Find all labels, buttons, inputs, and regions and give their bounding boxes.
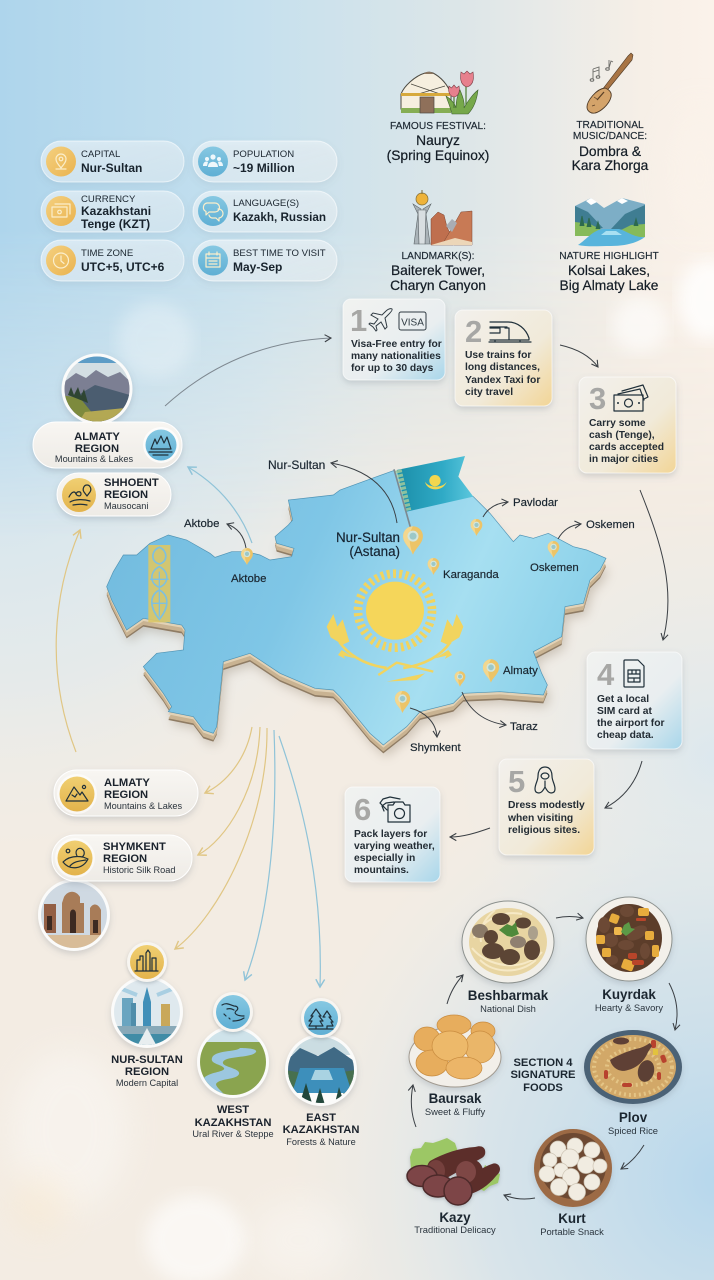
region: Almaty lower xyxy=(54,770,198,816)
pill: Shymkent region xyxy=(52,835,192,881)
dish xyxy=(584,1030,682,1104)
fact: languages: LANGUAGE(S) xyxy=(233,198,299,209)
icon badge: river xyxy=(213,992,253,1032)
food: Kuyrdak xyxy=(586,897,672,1013)
text: famous festival: Nauryz xyxy=(416,133,460,148)
pin: Aktobe xyxy=(241,548,253,565)
label: Aktobe inner: Aktobe xyxy=(231,573,266,585)
heading: signature foods: FOODS xyxy=(523,1082,563,1094)
region: East Kazakhstan: EAST xyxy=(306,1112,336,1124)
card: tip 5 modest dress: 5 xyxy=(508,764,525,799)
dish xyxy=(407,1138,500,1205)
food: Kazy: Kazy xyxy=(439,1210,471,1225)
icon: train xyxy=(489,322,531,342)
arrow: Kurt to Kazy xyxy=(504,1195,535,1199)
card: tip 1 visa: 1 xyxy=(350,303,367,338)
photo: mausoleum xyxy=(38,879,110,951)
card: tip 6 layers: especially in xyxy=(354,853,415,864)
card: tip 6 layers: varying weather, xyxy=(354,841,435,852)
arrow: Baursak to Beshbarmak xyxy=(447,975,463,1004)
icon badge: pine trees xyxy=(301,998,341,1038)
pin: Almaty xyxy=(483,659,499,683)
text: traditional music xyxy=(572,120,649,173)
text: traditional music: Dombra & xyxy=(579,144,641,159)
label: Karaganda: Karaganda xyxy=(443,569,499,581)
card: tip 2 trains: Yandex Taxi for xyxy=(465,375,540,386)
label: Aktobe outer: Aktobe xyxy=(184,518,219,530)
arrow: tip 2 to tip 3 xyxy=(560,345,598,367)
food: Kuyrdak: Kuyrdak xyxy=(602,987,656,1002)
region: Almaty lower: REGION xyxy=(104,789,148,801)
photo: river steppe xyxy=(196,1025,270,1098)
card: tip 3 cash: in major cities xyxy=(589,454,659,465)
food: Plov xyxy=(584,1030,682,1136)
panel: quick facts xyxy=(41,141,337,281)
card: tip 6 layers: mountains. xyxy=(354,865,409,876)
text: landmarks: Baiterek Tower, xyxy=(391,263,485,278)
heading: signature foods xyxy=(510,1057,576,1094)
region: Shhoent: REGION xyxy=(104,489,148,501)
food: Plov: Spiced Rice xyxy=(608,1125,658,1136)
region: Nur-Sultan: NUR-SULTAN xyxy=(111,1054,183,1066)
arrows: map to regions xyxy=(175,727,320,987)
label: Oskemen: Oskemen xyxy=(530,562,579,574)
fact: time zone: TIME ZONE xyxy=(81,248,133,259)
icon: visa stamp: VISA xyxy=(401,318,424,328)
arrow: south regions to north xyxy=(56,530,80,752)
food: Baursak: Baursak xyxy=(429,1091,482,1106)
label: Astana: (Astana) xyxy=(349,544,400,559)
food: Kazy: Traditional Delicacy xyxy=(414,1224,496,1235)
fact: languages xyxy=(193,191,337,232)
ornament: western band xyxy=(148,545,170,622)
card: tip 3 cash: 3 xyxy=(589,381,606,416)
text: famous festival: (Spring Equinox) xyxy=(387,148,489,163)
text: landmarks xyxy=(390,251,486,293)
text: landmarks: Charyn Canyon xyxy=(390,278,486,293)
pin: Shymkent xyxy=(395,691,410,713)
food: Kazy xyxy=(407,1138,500,1235)
food: Beshbarmak: National Dish xyxy=(480,1003,536,1014)
pill: Almaty region xyxy=(33,422,182,468)
pin: Astana xyxy=(403,526,423,555)
arrow: tip 3 to tip 4 xyxy=(640,490,668,640)
region: Nur-Sultan: REGION xyxy=(125,1066,169,1078)
dish xyxy=(586,897,672,981)
label: Nur-Sultan: Nur-Sultan xyxy=(268,458,325,472)
card: tip 3 cash: cash (Tenge), xyxy=(589,430,655,441)
photo: mountains xyxy=(60,354,134,428)
text: landmarks: LANDMARK(S): xyxy=(401,251,475,262)
card: tip 5 modest dress xyxy=(499,759,594,855)
pill: Almaty region: Mountains & Lakes xyxy=(55,454,133,464)
card: tip 2 trains: city travel xyxy=(465,387,513,398)
fact: time zone xyxy=(41,240,184,281)
region: East Kazakhstan: Forests & Nature xyxy=(286,1137,356,1147)
food: Baursak: Sweet & Fluffy xyxy=(425,1106,485,1117)
map labels xyxy=(184,458,635,754)
card: tip 4 sim: SIM card at xyxy=(597,706,653,717)
card: tip 5 modest dress: when visiting xyxy=(507,813,573,824)
region: Shhoent: Mausocani xyxy=(104,501,148,511)
emblem: sun and eagle xyxy=(327,574,463,682)
text: famous festival xyxy=(387,121,489,163)
fact: best time to visit xyxy=(193,240,337,281)
region: Almaty lower: Mountains & Lakes xyxy=(104,801,183,811)
fact: capital: Nur-Sultan xyxy=(81,161,142,175)
icon: cash xyxy=(614,385,648,411)
food: Plov: Plov xyxy=(619,1110,648,1125)
label: Almaty: Almaty xyxy=(503,665,538,677)
fact: time zone: UTC+5, UTC+6 xyxy=(81,260,165,274)
label: Oskemen north xyxy=(558,519,635,539)
label: Astana: Nur-Sultan xyxy=(336,530,400,545)
card: tip 2 trains: Use trains for xyxy=(465,350,531,361)
food: Kuyrdak: Hearty & Savory xyxy=(595,1002,663,1013)
food: Beshbarmak: Beshbarmak xyxy=(468,988,549,1003)
map: Kazakhstan xyxy=(107,456,609,757)
card: tip 4 sim: 4 xyxy=(597,657,615,692)
text: traditional music: MUSIC/DANCE: xyxy=(573,131,647,142)
icon: SIM card xyxy=(624,660,644,687)
region: Shymkent xyxy=(38,835,192,951)
panel: culture highlights xyxy=(387,53,659,293)
food: Kurt xyxy=(534,1129,612,1237)
photo: forest lake xyxy=(285,1034,359,1106)
heading: signature foods: SIGNATURE xyxy=(510,1069,576,1081)
icon: dombra and music notes xyxy=(587,53,633,113)
region: Nur-Sultan: Modern Capital xyxy=(116,1078,178,1088)
icon: camera and photos xyxy=(380,797,410,822)
region: Nur-Sultan xyxy=(110,942,184,1088)
card: tip 3 cash xyxy=(579,377,676,473)
fact: best time to visit: BEST TIME TO VISIT xyxy=(233,248,326,259)
food: Kurt: Portable Snack xyxy=(540,1226,604,1237)
arrow: Beshbarmak to Kuyrdak xyxy=(556,916,583,918)
card: tip 6 layers: 6 xyxy=(354,792,371,827)
card: tip 3 cash: cards accepted xyxy=(589,442,664,453)
arrow: tip 5 to tip 6 xyxy=(450,828,490,837)
card: tip 4 sim: the airport for xyxy=(597,718,665,729)
card: tip 4 sim: cheap data. xyxy=(597,730,654,741)
region: West Kazakhstan: WEST xyxy=(217,1104,249,1116)
arrow: tip 4 to tip 5 xyxy=(605,761,642,808)
label: Taraz: Taraz xyxy=(510,721,538,733)
heading: signature foods: SECTION 4 xyxy=(513,1057,573,1069)
card: tip 1 visa: Visa-Free entry for xyxy=(351,339,442,350)
icon: Baiterek tower and canyon xyxy=(413,190,472,245)
pin: Oskemen xyxy=(548,541,559,558)
label: Taraz xyxy=(462,692,538,733)
dish xyxy=(409,1015,501,1087)
label: Oskemen north: Oskemen xyxy=(586,519,635,531)
text: nature highlight: NATURE HIGHLIGHT xyxy=(559,251,659,262)
region: West Kazakhstan: KAZAKHSTAN xyxy=(195,1117,271,1129)
food: Kurt: Kurt xyxy=(558,1211,586,1226)
food: Baursak xyxy=(409,1015,501,1117)
arrow: Plov to Kurt xyxy=(621,1145,644,1169)
fact: population xyxy=(193,141,337,182)
region: West Kazakhstan xyxy=(192,992,274,1139)
dish xyxy=(462,901,554,983)
region: Almaty top xyxy=(33,354,182,468)
fact: population: ~19 Million xyxy=(233,161,295,175)
label: Aktobe outer xyxy=(184,518,246,548)
food: Beshbarmak xyxy=(462,901,554,1014)
icon: mountains and lake xyxy=(575,198,645,246)
text: traditional music: TRADITIONAL xyxy=(576,120,644,131)
card: tip 4 sim: Get a local xyxy=(597,694,649,705)
card: tip 2 trains: long distances, xyxy=(465,362,540,373)
text: nature highlight: Big Almaty Lake xyxy=(560,278,659,293)
fact: currency: CURRENCY xyxy=(81,194,136,205)
fact: capital xyxy=(41,141,184,182)
region: Shhoent xyxy=(57,473,171,516)
arrow: regions to tips xyxy=(165,338,331,406)
card: tip 5 modest dress: religious sites. xyxy=(508,825,580,836)
text: nature highlight xyxy=(559,251,659,293)
pill: Almaty region: ALMATY xyxy=(74,431,120,443)
card: tip 1 visa: many nationalities xyxy=(351,351,441,362)
label: Nur-Sultan xyxy=(268,458,397,523)
arrow: Aktobe to regions xyxy=(188,467,252,543)
pill: Shymkent region: SHYMKENT xyxy=(103,841,166,853)
card: tip 2 trains: 2 xyxy=(465,314,482,349)
fact: currency: Tenge (KZT) xyxy=(81,217,150,231)
card: tip 3 cash: Carry some xyxy=(589,418,646,429)
icon: yurt and tulips xyxy=(401,71,478,114)
pill: Almaty region: REGION xyxy=(75,443,119,455)
fact: languages: Kazakh, Russian xyxy=(233,210,326,224)
fact: currency xyxy=(41,191,184,232)
region: East Kazakhstan xyxy=(283,998,359,1147)
card: tip 5 modest dress: Dress modestly xyxy=(508,800,585,811)
arrow: Kuyrdak to Plov xyxy=(669,983,677,1030)
region: Shhoent: SHHOENT xyxy=(104,477,159,489)
icon: modest figure xyxy=(535,767,555,793)
region: Almaty lower: ALMATY xyxy=(104,777,150,789)
region: West Kazakhstan: Ural River & Steppe xyxy=(192,1129,274,1139)
region: East Kazakhstan: KAZAKHSTAN xyxy=(283,1124,359,1136)
text: nature highlight: Kolsai Lakes, xyxy=(568,263,650,278)
text: famous festival: FAMOUS FESTIVAL: xyxy=(390,121,486,132)
dish xyxy=(534,1129,612,1207)
card: tip 2 trains xyxy=(455,310,552,406)
text: traditional music: Kara Zhorga xyxy=(572,158,649,173)
card: tip 6 layers: Pack layers for xyxy=(354,829,427,840)
label: Shymkent xyxy=(410,708,461,754)
card: tip 4 sim xyxy=(587,652,682,749)
card: tip 1 visa: for up to 30 days xyxy=(351,363,434,374)
fact: population: POPULATION xyxy=(233,149,294,160)
fact: best time to visit: May-Sep xyxy=(233,260,282,274)
label: Pavlodar xyxy=(483,497,558,517)
icon: plane xyxy=(369,309,392,331)
card: tip 6 layers xyxy=(345,787,440,882)
pill: Shymkent region: Historic Silk Road xyxy=(103,865,176,875)
pill: Shymkent region: REGION xyxy=(103,853,147,865)
card: tip 1 visa xyxy=(343,299,445,380)
pin: Karaganda xyxy=(428,558,439,575)
arrow: Kazy to Baursak xyxy=(411,1085,416,1127)
photo: city xyxy=(110,975,184,1050)
pin: Pavlodar xyxy=(471,519,482,536)
fact: capital: CAPITAL xyxy=(81,149,121,160)
label: Pavlodar: Pavlodar xyxy=(513,497,558,509)
pin: Taraz xyxy=(455,671,465,687)
icon badge: skyline xyxy=(127,942,167,982)
fact: currency: Kazakhstani xyxy=(81,204,151,218)
label: Shymkent: Shymkent xyxy=(410,742,461,754)
flag xyxy=(394,456,473,540)
